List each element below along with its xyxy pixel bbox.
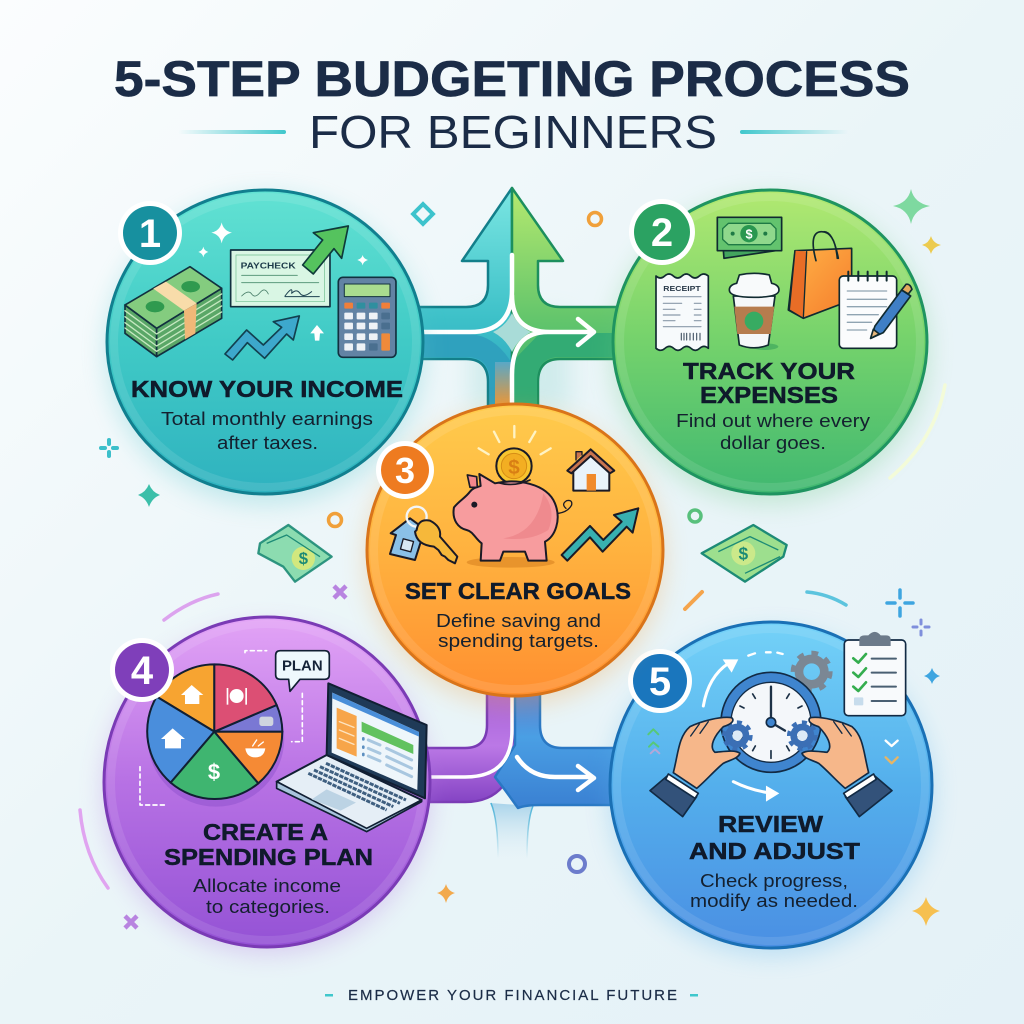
description: dollar goes. bbox=[720, 432, 826, 453]
description bbox=[161, 408, 373, 453]
icons: piggy bank, coin, house, key, arrow: $ bbox=[508, 456, 520, 479]
description bbox=[690, 870, 858, 911]
number badge 4 bbox=[110, 638, 174, 702]
connector arrow: steps 1 to 2 and up bbox=[410, 188, 625, 410]
description: Check progress, bbox=[700, 870, 848, 891]
panel: step 2 track your expenses bbox=[610, 190, 930, 505]
number badge 2: 2 bbox=[651, 211, 673, 255]
number badge 5 bbox=[628, 649, 692, 713]
icon: floating bill left bbox=[258, 525, 332, 582]
decorative sparkles and shapes bbox=[80, 189, 945, 928]
number badge 3 bbox=[376, 441, 434, 499]
icons: bill, receipt, coffee, bag, notepad: RECEIPT bbox=[663, 284, 701, 293]
number badge 2 bbox=[629, 199, 695, 265]
heading bbox=[164, 819, 373, 870]
description: modify as needed. bbox=[690, 890, 858, 911]
icons: clock, gears, hands, clipboard bbox=[648, 632, 906, 817]
icons: bill, receipt, coffee, bag, notepad: $ bbox=[745, 227, 753, 241]
panel: step 1 know your income bbox=[105, 190, 425, 505]
title: 5-STEP BUDGETING PROCESS bbox=[114, 51, 910, 107]
heading: KNOW YOUR INCOME bbox=[131, 376, 403, 402]
description: spending targets. bbox=[438, 630, 599, 651]
connector arrow: steps 4 to 5 bbox=[405, 690, 625, 860]
icon: floating bill right bbox=[702, 525, 787, 582]
description: to categories. bbox=[206, 896, 330, 917]
heading: SET CLEAR GOALS bbox=[405, 578, 631, 604]
heading: SPENDING PLAN bbox=[164, 844, 373, 870]
panel: step 3 set clear goals bbox=[365, 404, 665, 706]
number badge 3: 3 bbox=[395, 450, 415, 491]
panel: step 4 create a spending plan bbox=[102, 617, 432, 955]
description bbox=[436, 610, 601, 651]
description: Define saving and bbox=[436, 610, 601, 631]
icons: piggy bank, coin, house, key, arrow bbox=[390, 426, 638, 568]
description bbox=[193, 875, 341, 917]
number badge 1: 1 bbox=[139, 212, 161, 256]
title: FOR BEGINNERS bbox=[309, 106, 717, 158]
number badge 4: 4 bbox=[131, 649, 154, 693]
number badge 5: 5 bbox=[649, 660, 671, 704]
icons: bill, receipt, coffee, bag, notepad bbox=[656, 217, 912, 350]
heading: CREATE A bbox=[203, 819, 328, 845]
footer tagline: EMPOWER YOUR FINANCIAL FUTURE bbox=[348, 987, 677, 1004]
icons: pie chart, laptop, plan bubble: $ bbox=[208, 759, 220, 784]
description: Find out where every bbox=[676, 410, 871, 431]
heading: REVIEW bbox=[718, 811, 824, 837]
heading bbox=[683, 358, 855, 408]
heading: EXPENSES bbox=[700, 382, 838, 408]
panel: step 5 review and adjust bbox=[608, 622, 934, 956]
icons: pie chart, laptop, plan bubble: PLAN bbox=[282, 658, 323, 674]
title bbox=[114, 51, 910, 158]
icons: cash, paycheck, arrows, calculator: PAYCHECK bbox=[241, 261, 297, 271]
number badge 1 bbox=[118, 201, 182, 265]
description bbox=[676, 410, 871, 453]
description: after taxes. bbox=[217, 432, 318, 453]
icons: cash, paycheck, arrows, calculator bbox=[125, 222, 396, 360]
description: Allocate income bbox=[193, 875, 341, 896]
heading: TRACK YOUR bbox=[683, 358, 855, 384]
icons: pie chart, laptop, plan bubble bbox=[140, 651, 427, 832]
heading: AND ADJUST bbox=[689, 838, 861, 864]
icon: floating bill right: $ bbox=[739, 543, 749, 563]
description: Total monthly earnings bbox=[161, 408, 373, 429]
heading bbox=[689, 811, 861, 864]
icon: floating bill left: $ bbox=[299, 549, 309, 568]
